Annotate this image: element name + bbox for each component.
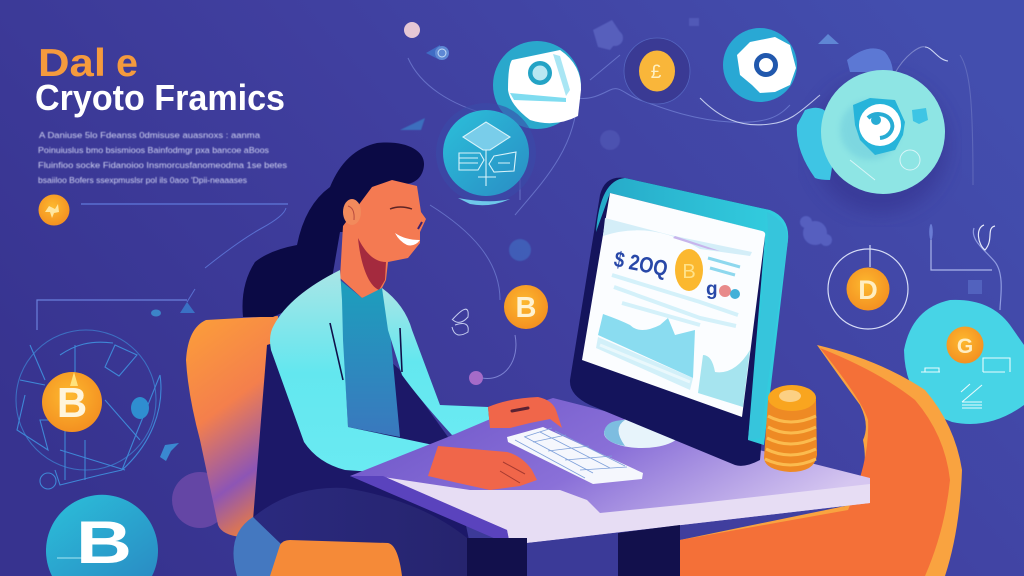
intro text block: bsaiiloo Bofers ssexpmuslsr pol ils 0aoo 'Dpii-neaaases	[38, 175, 247, 185]
title: Dal	[38, 42, 106, 85]
network globe with bitcoin coin	[16, 330, 179, 489]
desk	[350, 398, 870, 545]
smile	[395, 233, 420, 245]
nostril	[418, 222, 422, 229]
circle: teal gear with ring icon	[723, 28, 797, 102]
neck shadow	[358, 238, 386, 290]
title: Cryoto Framics	[35, 77, 285, 118]
far hand	[488, 397, 562, 428]
coin stack	[764, 385, 817, 472]
keyboard	[507, 427, 643, 484]
teal bitcoin circle: B	[76, 509, 132, 576]
eye	[390, 207, 412, 209]
corner wave	[698, 350, 750, 407]
title: e	[116, 42, 138, 85]
far sleeve	[382, 288, 490, 435]
shirt	[340, 280, 400, 437]
intro text block: A Daniuse 5lo Fdeanss 0dmisuse auasnoxs : aanma	[39, 130, 260, 140]
network globe with bitcoin coin: B	[57, 379, 87, 426]
icon: small orange coin and rule	[38, 194, 288, 268]
intro text block	[38, 130, 287, 185]
circle: aqua blob with coin: G	[957, 335, 973, 358]
lapels	[330, 323, 402, 380]
circle: teal monitor icon	[493, 41, 581, 129]
icon: pale dot	[404, 22, 420, 38]
circle: blue document icon	[436, 103, 536, 205]
icon: small tag	[426, 45, 449, 60]
circle: large aqua swirl icon	[797, 48, 948, 213]
swirl lines and purple dot	[452, 309, 516, 385]
desk legs	[467, 525, 680, 576]
hair	[242, 142, 424, 317]
screen header band	[603, 218, 752, 256]
thigh highlight	[233, 517, 282, 576]
near hand	[428, 446, 537, 490]
screen coin	[675, 249, 703, 291]
chair	[172, 316, 278, 540]
icon: yellow coin with ring: £	[651, 62, 662, 83]
circle: aqua blob with coin	[904, 300, 1024, 424]
person	[233, 142, 870, 576]
decorative connecting lines	[408, 55, 790, 300]
monitor	[570, 178, 788, 466]
bracket with glyph	[929, 224, 1001, 310]
ear	[343, 199, 361, 225]
floating faint shapes	[400, 18, 832, 261]
intro text block: Fluinfioo socke Fidanoioo Insmorcusfanomeodma 1se betes	[38, 160, 287, 170]
dark torso	[253, 320, 470, 545]
content rows	[612, 275, 738, 326]
center bitcoin coin	[504, 285, 548, 329]
icon: yellow coin with ring	[624, 38, 690, 104]
screen	[582, 193, 765, 417]
near sleeve	[270, 270, 438, 476]
icon: coin with white ring: D	[858, 275, 878, 305]
cushion	[270, 540, 402, 576]
price text: $ 2OQ	[612, 246, 670, 281]
lap	[233, 488, 467, 576]
intro text block: Poinuiuslus bmo bsismioos Bainfodmgr pxa bancoe aBoos	[38, 145, 269, 155]
chart	[598, 314, 695, 378]
stand	[604, 418, 680, 448]
lines upper right	[700, 47, 973, 185]
teal bitcoin circle	[46, 495, 158, 576]
monitor: B	[682, 261, 696, 283]
triangle marker	[818, 34, 839, 44]
neck and face	[340, 180, 426, 298]
bracket line with triangle	[37, 289, 195, 330]
center bitcoin coin: B	[516, 292, 536, 324]
small glyphs: g	[706, 279, 718, 300]
title	[35, 42, 285, 118]
orange fox-like shape	[680, 345, 962, 576]
body	[570, 178, 783, 466]
icon: coin with white ring	[828, 245, 908, 329]
teal bezel top	[596, 178, 788, 445]
